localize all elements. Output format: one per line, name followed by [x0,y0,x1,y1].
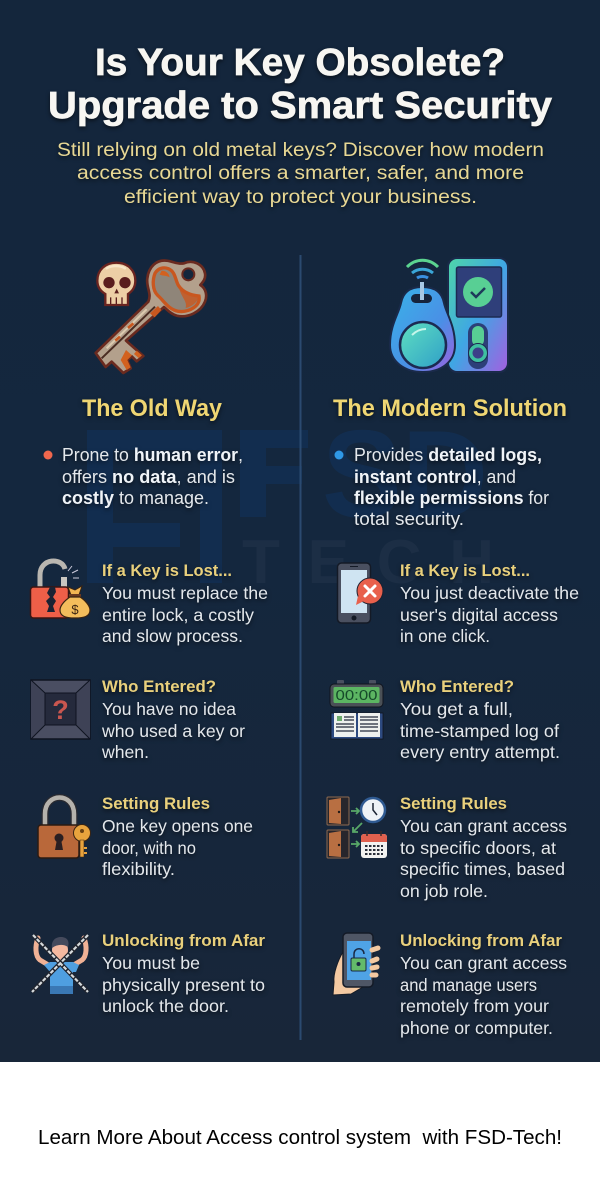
item: setting rules, old [38,795,253,879]
old way summary [62,445,243,508]
heading: If a Key is Lost... [400,562,530,580]
description: door, with no [102,838,196,858]
description [102,583,268,646]
item: unlocking from afar, modern [333,932,567,1038]
watermark logo: SD [322,406,488,544]
icon: broken lock and money bag [30,561,90,618]
heading: Setting Rules [400,795,507,813]
subtitle: access control offers a smarter, safer, and more [77,163,524,184]
subtitle: efficient way to protect your business. [124,187,477,208]
description: in one click. [400,626,490,646]
modern solution heading: The Modern Solution [333,395,567,422]
heading: Who Entered? [102,678,216,696]
icon: digital clock and log book: 00:00 [336,688,378,704]
description: when. [101,742,149,762]
old way summary: Prone to human error, [62,445,243,465]
heading: If a Key is Lost... [102,562,232,580]
old way summary: costly to manage. [62,488,209,508]
item: unlocking from afar, old [32,932,266,1016]
description [400,953,567,1038]
item: who entered, modern [330,678,560,762]
description: to specific doors, at [400,838,556,858]
icon: mystery box [31,680,90,739]
description: remotely from your [400,996,549,1016]
description: You must be [102,953,200,973]
heading: Unlocking from Afar [102,932,266,950]
description: You just deactivate the [400,583,579,603]
description [400,583,579,646]
description [400,699,560,762]
item: lost key, old [30,561,268,646]
icon: rusty key [96,261,206,373]
description: You have no idea [102,699,236,719]
item: lost key, modern [338,562,579,646]
bullet dot [334,450,344,460]
modern solution summary: Provides detailed logs, [354,445,542,465]
description [400,816,567,901]
heading: Setting Rules [102,795,210,813]
description: time-stamped log of [400,721,559,741]
icon: broken lock and money bag: $ [71,602,79,617]
watermark logo: TECH [242,528,494,597]
old way summary: offers no data, and is [62,467,235,487]
description: flexibility. [102,859,175,879]
description: on job role. [400,881,488,901]
icon: digital clock and log book [330,680,383,739]
title [48,42,552,127]
modern solution summary: instant control, and [354,467,516,487]
panel: the old way [30,261,268,1016]
description: specific times, based [400,859,565,879]
description [102,953,265,1016]
description: physically present to [102,975,265,995]
modern solution summary [354,445,549,529]
modern solution summary: flexible permissions for [354,488,549,508]
description: entire lock, a costly [102,605,254,625]
description: who used a key or [101,721,245,741]
item: setting rules, modern [327,795,567,901]
description [102,816,253,879]
icon: mystery box: ? [52,695,69,725]
icon: skull [97,263,135,305]
description: phone or computer. [400,1018,553,1038]
description [101,699,245,762]
description: user's digital access [400,605,558,625]
description: and slow process. [102,626,243,646]
old way heading: The Old Way [82,395,223,422]
icon: doors, clock and calendar [327,797,387,858]
center divider [300,255,302,1040]
icon: hand holding phone [333,933,378,995]
icon: padlock with key [38,798,90,858]
heading: Who Entered? [400,678,514,696]
description: You get a full, [400,699,513,719]
description: and manage users [400,975,537,995]
panel: the modern solution [327,258,579,1038]
subtitle [57,140,544,208]
subtitle: Still relying on old metal keys? Discover how modern [57,140,544,161]
title: Upgrade to Smart Security [48,85,552,127]
description: unlock the door. [102,996,229,1016]
icon: chained person [32,935,88,994]
description: You can grant access [400,953,567,973]
description: You must replace the [102,583,268,603]
watermark logo [87,406,494,597]
description: every entry attempt. [400,742,560,762]
heading: Unlocking from Afar [400,932,563,950]
modern solution summary: total security. [354,509,464,529]
item: who entered, old [31,678,245,762]
description: One key opens one [102,816,253,836]
title: Is Your Key Obsolete? [95,42,505,84]
description: You can grant access [400,816,567,836]
footer call to action: Learn More About Access control system with FSD-Tech! [38,1127,562,1149]
icon: phone with deny bubble [338,563,383,623]
bullet dot [44,450,52,460]
icon: smart fob and panel [390,258,508,372]
